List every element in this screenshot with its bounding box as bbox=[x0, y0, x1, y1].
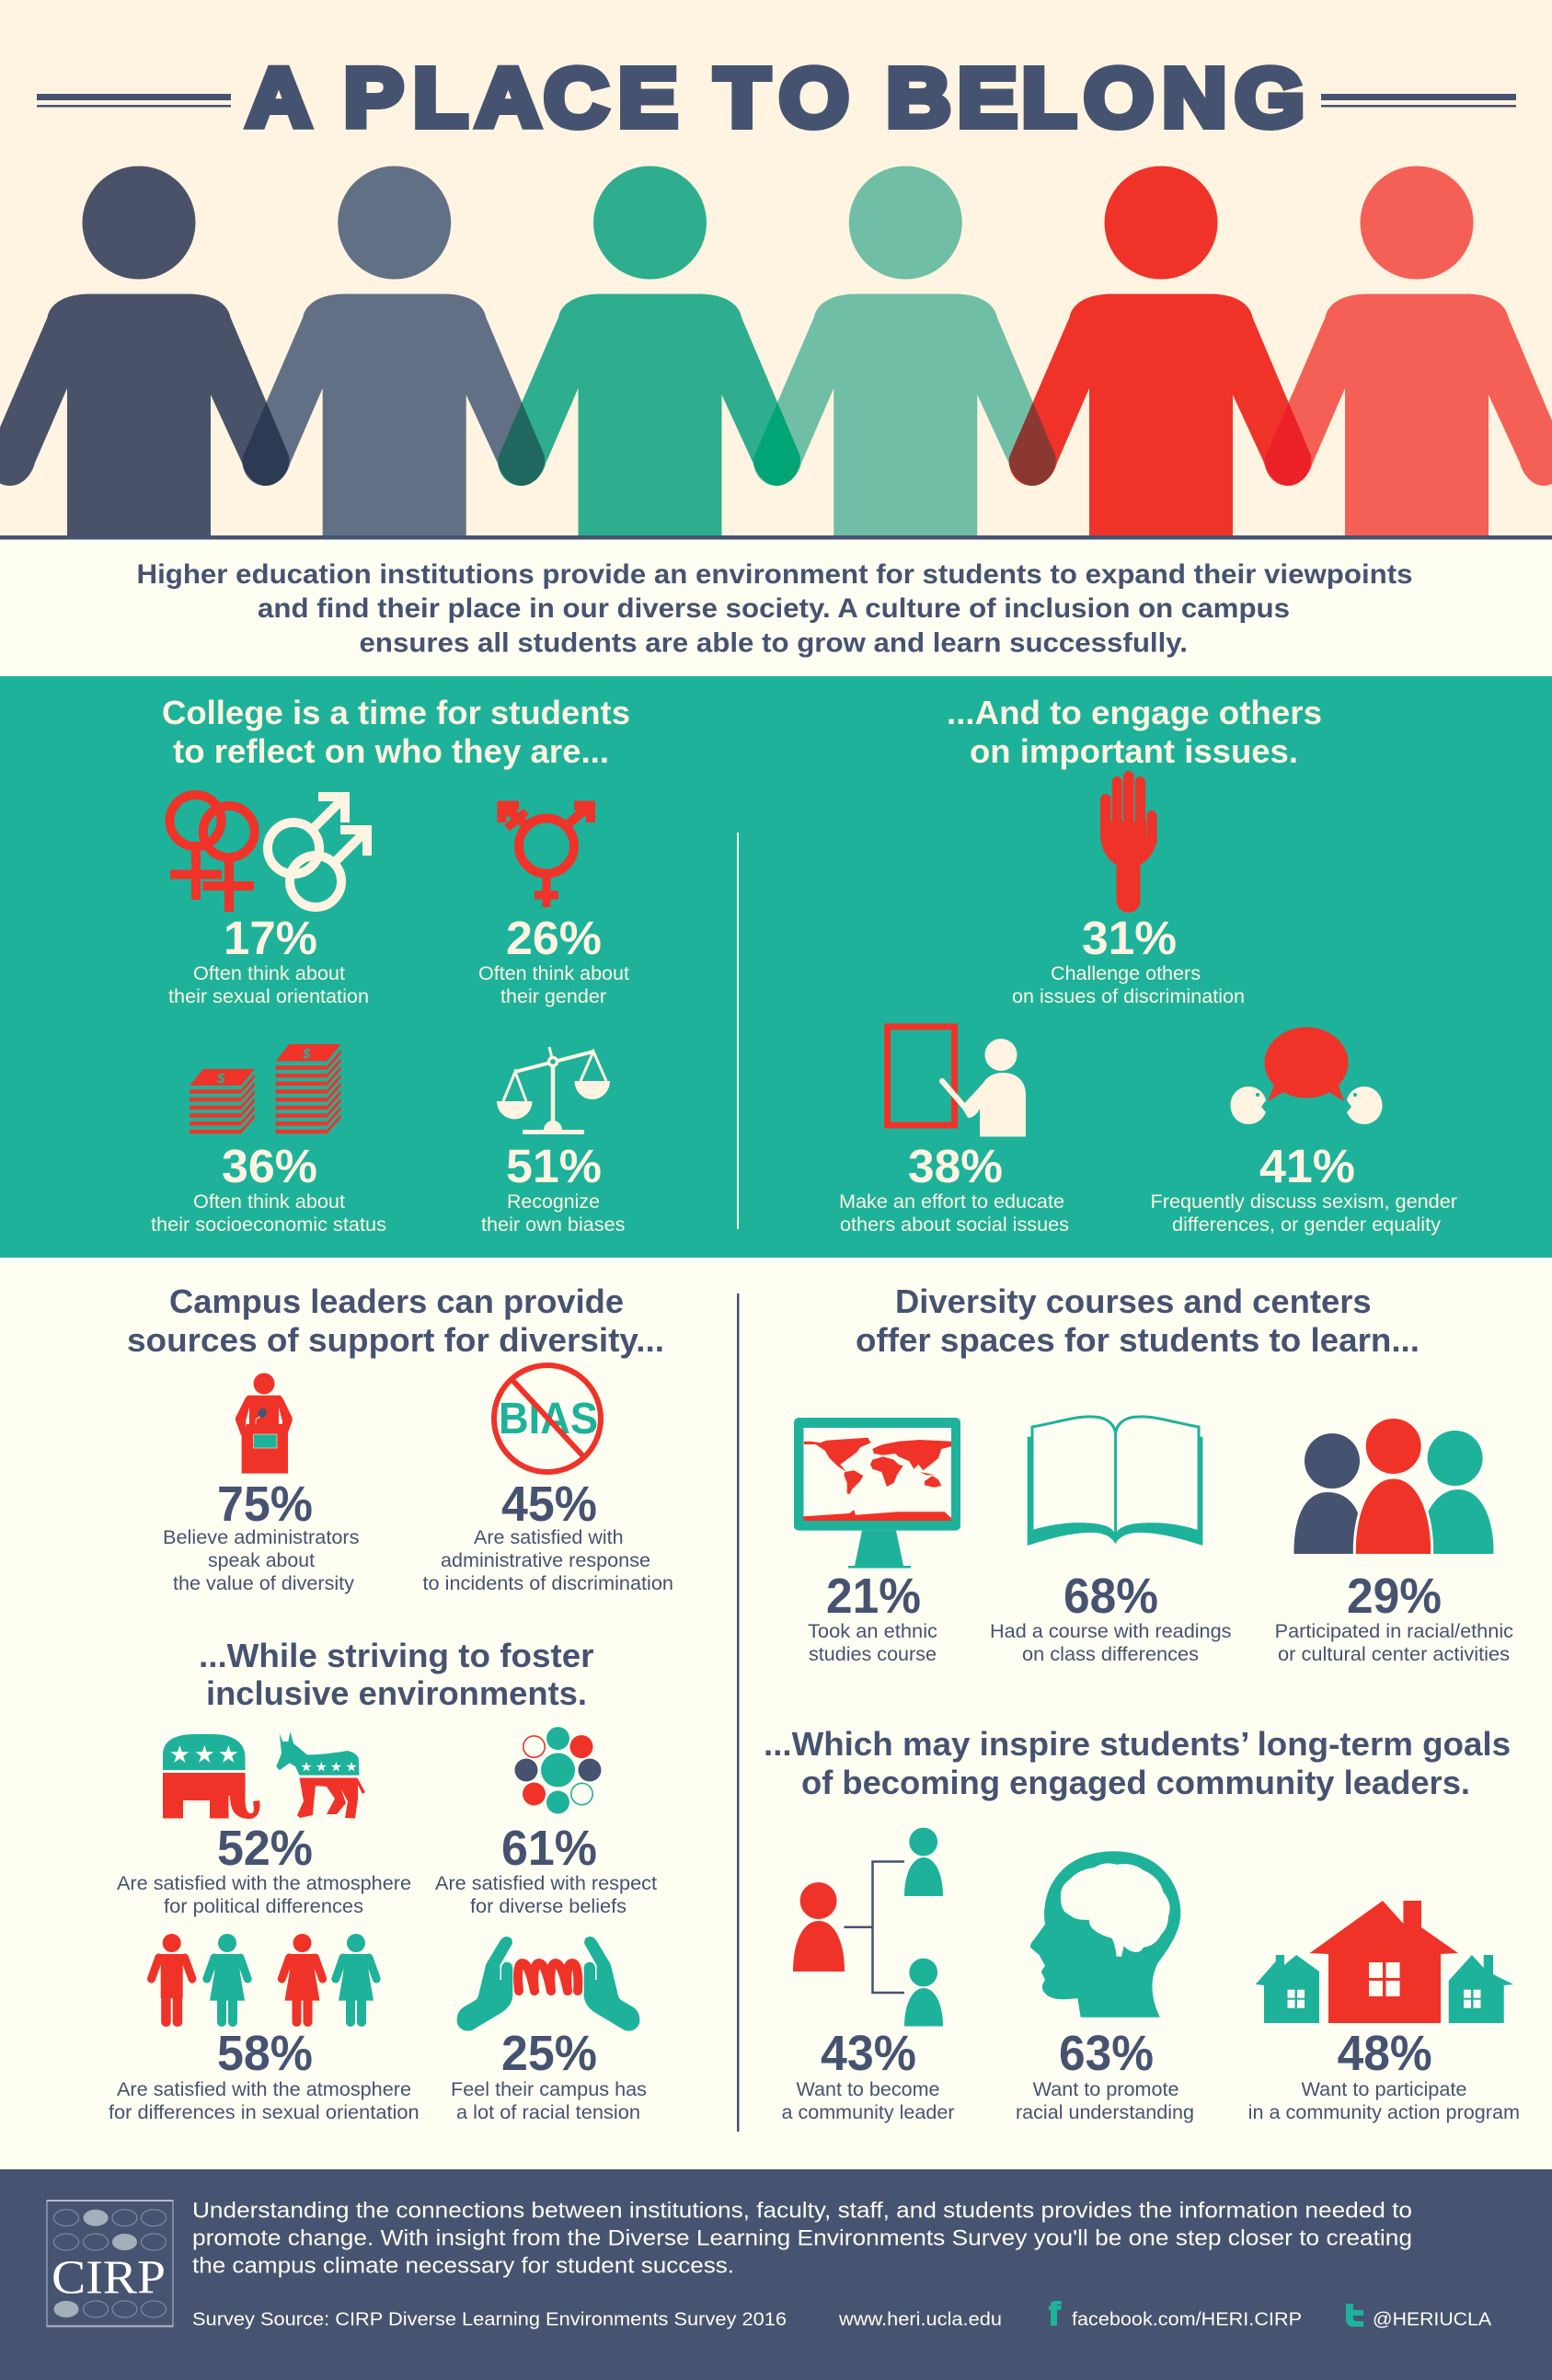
caption: differences, or gender equality bbox=[1172, 1214, 1442, 1236]
stat: administrative response bbox=[423, 1365, 673, 1594]
icon: leader connected to two people bbox=[793, 1828, 943, 2026]
caption bbox=[1248, 2079, 1520, 2123]
value 63%: 63% bbox=[1059, 2026, 1154, 2081]
value 48%: 48% bbox=[1338, 2026, 1432, 2081]
intro text bbox=[136, 559, 1413, 659]
icon: stacks of money: $ bbox=[302, 1046, 311, 1062]
stat: class differences bbox=[990, 1417, 1231, 1665]
value 75%: 75% bbox=[217, 1477, 313, 1532]
caption: Believe administrators bbox=[163, 1527, 359, 1548]
heading: inclusive environments bbox=[199, 1637, 594, 1712]
heading: engage: ...And to engage others bbox=[947, 694, 1322, 731]
caption bbox=[808, 1621, 937, 1665]
person 6 bbox=[1265, 166, 1552, 536]
text block: closing statement: the campus climate necessary for student success. bbox=[192, 2254, 734, 2279]
caption: Often think about bbox=[193, 963, 345, 984]
caption: to incidents of discrimination bbox=[423, 1573, 673, 1594]
icon: circle cluster bbox=[515, 1727, 602, 1814]
caption bbox=[1016, 2079, 1194, 2123]
caption: Make an effort to educate bbox=[839, 1191, 1064, 1213]
icon: no bias sign: BIAS bbox=[499, 1395, 598, 1443]
value 36%: 36% bbox=[222, 1140, 317, 1192]
value 25%: 25% bbox=[501, 2026, 597, 2081]
caption: speak about bbox=[208, 1550, 315, 1571]
icon: open book bbox=[1028, 1417, 1202, 1546]
caption: Are satisfied with the atmosphere bbox=[117, 2079, 411, 2100]
icon: group of three people bbox=[1293, 1419, 1494, 1555]
caption: on class differences bbox=[1022, 1644, 1199, 1665]
heading: reflect: to reflect on who they are... bbox=[173, 732, 609, 770]
caption: Want to promote bbox=[1033, 2079, 1179, 2100]
caption bbox=[782, 2079, 955, 2123]
caption bbox=[990, 1621, 1231, 1665]
stat: socioeconomic status bbox=[151, 1044, 386, 1236]
caption: their gender bbox=[500, 986, 606, 1007]
stat: sexual orientation atmosphere bbox=[109, 1934, 420, 2123]
caption bbox=[435, 1873, 657, 1917]
stat: racial tension bbox=[451, 1937, 647, 2123]
caption: the value of diversity bbox=[173, 1573, 355, 1594]
heading: engage: on important issues. bbox=[970, 732, 1298, 770]
caption bbox=[163, 1527, 359, 1594]
text block: closing statement bbox=[192, 2199, 1412, 2279]
caption bbox=[423, 1527, 673, 1594]
logo: CIRP: CIRP bbox=[52, 2252, 166, 2305]
icon: twitter bbox=[1346, 2304, 1363, 2327]
caption bbox=[117, 1873, 411, 1917]
caption bbox=[451, 2079, 647, 2123]
heading: diversity courses bbox=[856, 1282, 1420, 1359]
caption: or cultural center activities bbox=[1278, 1644, 1510, 1665]
caption: Recognize bbox=[507, 1191, 600, 1213]
caption: their sexual orientation bbox=[168, 986, 369, 1007]
heading: inclusive environments: inclusive environments. bbox=[206, 1674, 587, 1712]
icon: balance scale bbox=[497, 1047, 610, 1134]
stat: gender bbox=[478, 805, 629, 1007]
icon: hands compressing spring bbox=[457, 1937, 639, 2031]
caption: Participated in racial/ethnic bbox=[1275, 1621, 1513, 1642]
caption: in a community action program bbox=[1248, 2102, 1520, 2123]
caption bbox=[1012, 963, 1245, 1007]
caption bbox=[839, 1191, 1069, 1236]
caption: Want to participate bbox=[1301, 2079, 1466, 2100]
caption: Frequently discuss sexism, gender bbox=[1150, 1191, 1457, 1213]
text: facebook: facebook.com/HERI.CIRP bbox=[1072, 2309, 1302, 2329]
heading: engage bbox=[947, 694, 1322, 770]
caption bbox=[481, 1191, 626, 1236]
caption: Had a course with readings bbox=[990, 1621, 1231, 1642]
value 51%: 51% bbox=[506, 1140, 602, 1192]
logo: CIRP bbox=[47, 2200, 173, 2328]
icon: head with brain bbox=[1030, 1851, 1180, 2018]
caption bbox=[151, 1191, 386, 1236]
heading: inclusive environments: ...While striving to foster bbox=[199, 1637, 594, 1674]
text: survey source: Survey Source: CIRP Diverse Learning Environments Survey 2016 bbox=[192, 2309, 787, 2329]
stat: community action bbox=[1248, 1901, 1520, 2123]
heading: reflect: College is a time for students bbox=[162, 694, 630, 731]
caption: racial understanding bbox=[1016, 2102, 1194, 2123]
icon: stacks of money: $ bbox=[216, 1071, 225, 1087]
text block: closing statement: Understanding the connections between institutions, faculty, staff, and students provides the information needed to bbox=[192, 2199, 1412, 2224]
value 17%: 17% bbox=[224, 912, 317, 964]
heading: long-term goals: ...Which may inspire students’ long-term goals bbox=[764, 1725, 1511, 1763]
value 61%: 61% bbox=[501, 1821, 597, 1876]
icon: two heads talking with speech bubble bbox=[1231, 1027, 1382, 1124]
person 4 bbox=[753, 166, 1056, 536]
stat: community leader bbox=[782, 1828, 955, 2123]
stat: ethnic studies bbox=[794, 1418, 960, 1665]
value 45%: 45% bbox=[501, 1477, 597, 1532]
caption: Often think about bbox=[193, 1191, 345, 1213]
icon: venus and mars pairs bbox=[169, 795, 367, 912]
intro text: Higher education institutions provide an environment for students to expand their viewpoints bbox=[136, 559, 1413, 590]
stat: administrators bbox=[163, 1373, 359, 1594]
caption: for political differences bbox=[164, 1896, 363, 1917]
caption: a community leader bbox=[782, 2102, 955, 2123]
icon: no bias sign bbox=[494, 1365, 601, 1472]
intro text: and find their place in our diverse society. A culture of inclusion on campus bbox=[258, 593, 1290, 624]
stat: challenge others bbox=[1012, 771, 1245, 1007]
intro text: ensures all students are able to grow and learn successfully. bbox=[359, 627, 1188, 659]
person 2 bbox=[242, 166, 545, 536]
caption: Are satisfied with the atmosphere bbox=[117, 1873, 411, 1894]
person 5 bbox=[1009, 166, 1311, 536]
heading: campus leaders bbox=[127, 1282, 664, 1359]
stat: educate others bbox=[839, 1027, 1069, 1236]
stat: sexual orientation bbox=[168, 795, 369, 1007]
icon: transgender symbol bbox=[502, 805, 591, 907]
icon: teacher at board bbox=[887, 1027, 1026, 1137]
heading: campus leaders: sources of support for diversity... bbox=[127, 1321, 664, 1359]
heading: diversity courses: Diversity courses and centers bbox=[895, 1282, 1372, 1320]
heading: long-term goals bbox=[764, 1725, 1511, 1801]
panel: teal band bbox=[0, 676, 1552, 1258]
value 43%: 43% bbox=[821, 2026, 916, 2081]
caption: on issues of discrimination bbox=[1012, 986, 1245, 1007]
value 29%: 29% bbox=[1347, 1569, 1442, 1624]
caption bbox=[109, 2079, 420, 2123]
caption: Challenge others bbox=[1051, 963, 1201, 984]
icon: three houses bbox=[1256, 1901, 1513, 2023]
caption: Took an ethnic bbox=[808, 1621, 937, 1642]
heading: reflect bbox=[162, 694, 630, 770]
stat: diverse beliefs bbox=[435, 1727, 657, 1917]
person 3 bbox=[498, 166, 800, 536]
caption: studies course bbox=[809, 1644, 937, 1665]
icon: stacks of money bbox=[190, 1044, 340, 1133]
value 68%: 68% bbox=[1063, 1569, 1158, 1624]
heading: diversity courses: offer spaces for students to learn... bbox=[856, 1321, 1420, 1359]
heading: long-term goals: of becoming engaged community leaders. bbox=[801, 1764, 1470, 1801]
stat: racial understanding bbox=[1016, 1851, 1194, 2123]
text: website: www.heri.ucla.edu bbox=[838, 2309, 1002, 2329]
value 52%: 52% bbox=[217, 1821, 313, 1876]
caption: for diverse beliefs bbox=[470, 1896, 627, 1917]
caption: Want to become bbox=[797, 2079, 940, 2100]
caption: Are satisfied with respect bbox=[435, 1873, 657, 1894]
caption bbox=[1150, 1191, 1457, 1236]
caption: their socioeconomic status bbox=[151, 1214, 386, 1236]
value 26%: 26% bbox=[506, 912, 602, 964]
caption: Feel their campus has bbox=[451, 2079, 647, 2100]
clasped hands bbox=[243, 402, 1312, 486]
value 38%: 38% bbox=[908, 1140, 1003, 1192]
value 21%: 21% bbox=[826, 1569, 921, 1624]
icon: monitor with world map bbox=[794, 1418, 960, 1568]
title: A PLACE TO BELONG bbox=[247, 51, 1305, 144]
text block: closing statement: promote change. With insight from the Diverse Learning Environments Survey you'll be one step closer to creating bbox=[192, 2226, 1412, 2251]
caption bbox=[1275, 1621, 1513, 1665]
icon: elephant and donkey bbox=[163, 1731, 365, 1819]
caption: for differences in sexual orientation bbox=[109, 2102, 420, 2123]
illustration: six people holding hands bbox=[0, 166, 1552, 536]
panel: lower cream section bbox=[109, 1282, 1520, 2132]
value 58%: 58% bbox=[217, 2026, 313, 2081]
caption: Often think about bbox=[478, 963, 629, 984]
stat: political differences bbox=[117, 1731, 411, 1917]
text: twitter: @HERIUCLA bbox=[1373, 2309, 1492, 2329]
caption: administrative response bbox=[441, 1550, 650, 1571]
caption bbox=[168, 963, 369, 1007]
value 41%: 41% bbox=[1259, 1140, 1355, 1192]
person 1 bbox=[0, 166, 289, 536]
caption bbox=[478, 963, 629, 1007]
stat: own biases bbox=[481, 1047, 626, 1236]
icon: raised hand bbox=[1100, 771, 1157, 913]
icon: facebook bbox=[1049, 2301, 1062, 2326]
caption: a lot of racial tension bbox=[456, 2102, 640, 2123]
panel: footer bbox=[0, 2169, 1552, 2380]
caption: Are satisfied with bbox=[474, 1527, 624, 1548]
caption: their own biases bbox=[481, 1214, 626, 1236]
caption: others about social issues bbox=[840, 1214, 1069, 1236]
icon: male and female figures bbox=[151, 1934, 376, 2027]
heading: campus leaders: Campus leaders can provide bbox=[169, 1282, 624, 1320]
icon: speaker at podium bbox=[236, 1373, 293, 1474]
stat: discuss sexism bbox=[1150, 1027, 1457, 1236]
stat: cultural center bbox=[1275, 1419, 1513, 1665]
value 31%: 31% bbox=[1082, 912, 1177, 964]
